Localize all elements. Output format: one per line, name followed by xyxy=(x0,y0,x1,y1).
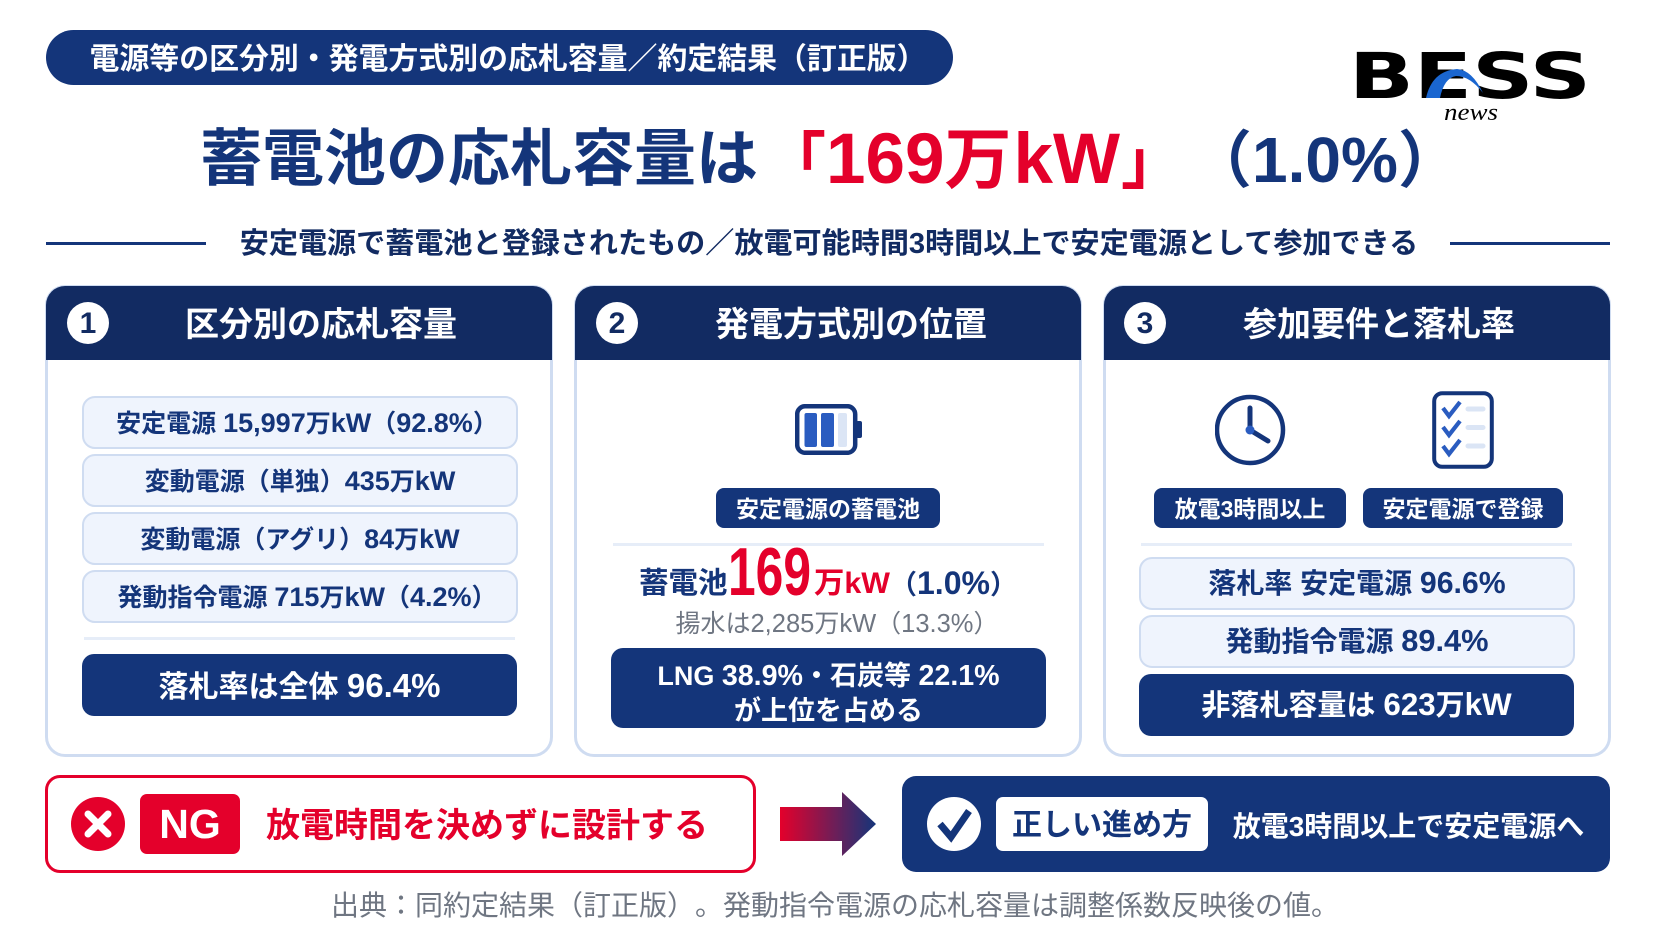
row: 変動電源 アグリ: 変動電源（アグリ）84万kW xyxy=(140,524,460,554)
tag: 安定電源の蓄電池: 安定電源の蓄電池 xyxy=(736,496,920,522)
panel 3 heading: 参加要件と落札率 xyxy=(1243,306,1515,344)
icon: battery xyxy=(795,404,862,455)
main title: 蓄電池の応札容量は xyxy=(200,125,758,194)
icon: checklist xyxy=(1432,391,1494,469)
big figure: 蓄電池 169万kW: 蓄電池 xyxy=(639,567,728,600)
row: 発動指令電源 xyxy=(82,570,518,623)
panel 1 number badge xyxy=(67,302,109,344)
panel 1 heading: 区分別の応札容量 xyxy=(185,306,457,344)
panel 1: 区分別の応札容量 xyxy=(45,285,553,757)
label: 正しい進め方 xyxy=(996,797,1208,851)
tag: 安定電源で登録 xyxy=(1363,488,1563,528)
main title xyxy=(200,120,1460,199)
tag: 安定電源で登録: 安定電源で登録 xyxy=(1382,496,1544,522)
tag: 放電3時間以上 xyxy=(1154,488,1346,528)
panel 2 heading: 発電方式別の位置 xyxy=(715,306,987,344)
tag: 安定電源の蓄電池 xyxy=(716,488,940,528)
row: 変動電源 アグリ xyxy=(82,512,518,565)
arrow xyxy=(780,792,876,856)
tag: 放電3時間以上: 放電3時間以上 xyxy=(1175,496,1325,522)
callout: LNG 石炭等 xyxy=(611,648,1046,728)
callout: 落札率: 落札率は全体 96.4% xyxy=(159,666,440,704)
callout: 非落札容量 xyxy=(1139,674,1574,736)
main title: （1.0%） xyxy=(1190,124,1460,196)
callout: LNG 石炭等: LNG 38.9%・石炭等 22.1% xyxy=(657,660,1000,692)
callout: 落札率 xyxy=(82,654,517,716)
logo: BESS news: BESS xyxy=(1349,40,1591,113)
big figure: 蓄電池 169万kW: 169 xyxy=(728,534,811,610)
text: 放電3時間以上で安定電源へ: 放電3時間以上で安定電源へ xyxy=(1233,811,1584,842)
callout: LNG 石炭等: が上位を占める xyxy=(734,696,923,726)
panel 3: 参加要件と落札率 xyxy=(1103,285,1611,757)
big figure: 蓄電池 169万kW: 万kW xyxy=(814,567,891,600)
big figure: 蓄電池 169万kW xyxy=(639,534,1017,610)
icon: check xyxy=(927,797,981,851)
NG badge xyxy=(140,794,240,854)
icon: clock xyxy=(1215,394,1286,466)
icon: cross xyxy=(71,797,125,851)
NG badge: NG xyxy=(159,800,221,846)
panel 2 number badge xyxy=(596,302,638,344)
panel 3 number badge: 3 xyxy=(1137,307,1153,340)
panel 2 number badge: 2 xyxy=(609,307,625,340)
logo: BESS news xyxy=(1349,40,1591,126)
note: 揚水: 揚水は2,285万kW（13.3%） xyxy=(675,610,998,638)
callout: 非落札容量: 非落札容量は 623万kW xyxy=(1201,687,1512,722)
row: 安定電源 xyxy=(82,396,518,449)
NG text: 放電時間を決めずに設計する xyxy=(266,807,708,845)
panel 1 number badge: 1 xyxy=(80,307,96,340)
top banner pill: 電源等の区分別・発電方式別の応札容量／約定結果（訂正版） xyxy=(90,43,926,76)
row: 落札率 安定電源: 落札率 安定電源 96.6% xyxy=(1208,567,1506,600)
panel 2: 発電方式別の位置 xyxy=(574,285,1082,757)
subtitle with side rules: 安定電源で蓄電池と登録されたもの／放電可能時間3時間以上で安定電源として参加できる xyxy=(240,228,1418,260)
top banner pill xyxy=(46,30,953,85)
correct-way callout xyxy=(902,776,1610,872)
big figure: 蓄電池 169万kW: （1.0%） xyxy=(890,565,1017,601)
logo: BESS news: news xyxy=(1444,100,1498,126)
label: 正しい進め方: 正しい進め方 xyxy=(1012,809,1192,842)
row: 変動電源 単独 xyxy=(82,454,518,507)
row: 発動指令電源 落札率: 発動指令電源 89.4% xyxy=(1225,623,1489,658)
NG callout xyxy=(45,775,756,873)
row: 安定電源: 安定電源 15,997万kW（92.8%） xyxy=(116,408,498,438)
row: 発動指令電源: 発動指令電源 715万kW（4.2%） xyxy=(117,582,497,612)
row: 発動指令電源 落札率 xyxy=(1139,615,1575,668)
row: 落札率 安定電源 xyxy=(1139,557,1575,610)
main title: 「169万kW」 xyxy=(764,120,1183,199)
source note: 出典：同約定結果（訂正版）。発動指令電源の応札容量は調整係数反映後の値。 xyxy=(331,890,1339,921)
row: 変動電源 単独: 変動電源（単独）435万kW xyxy=(145,466,455,496)
panel 3 number badge xyxy=(1124,302,1166,344)
